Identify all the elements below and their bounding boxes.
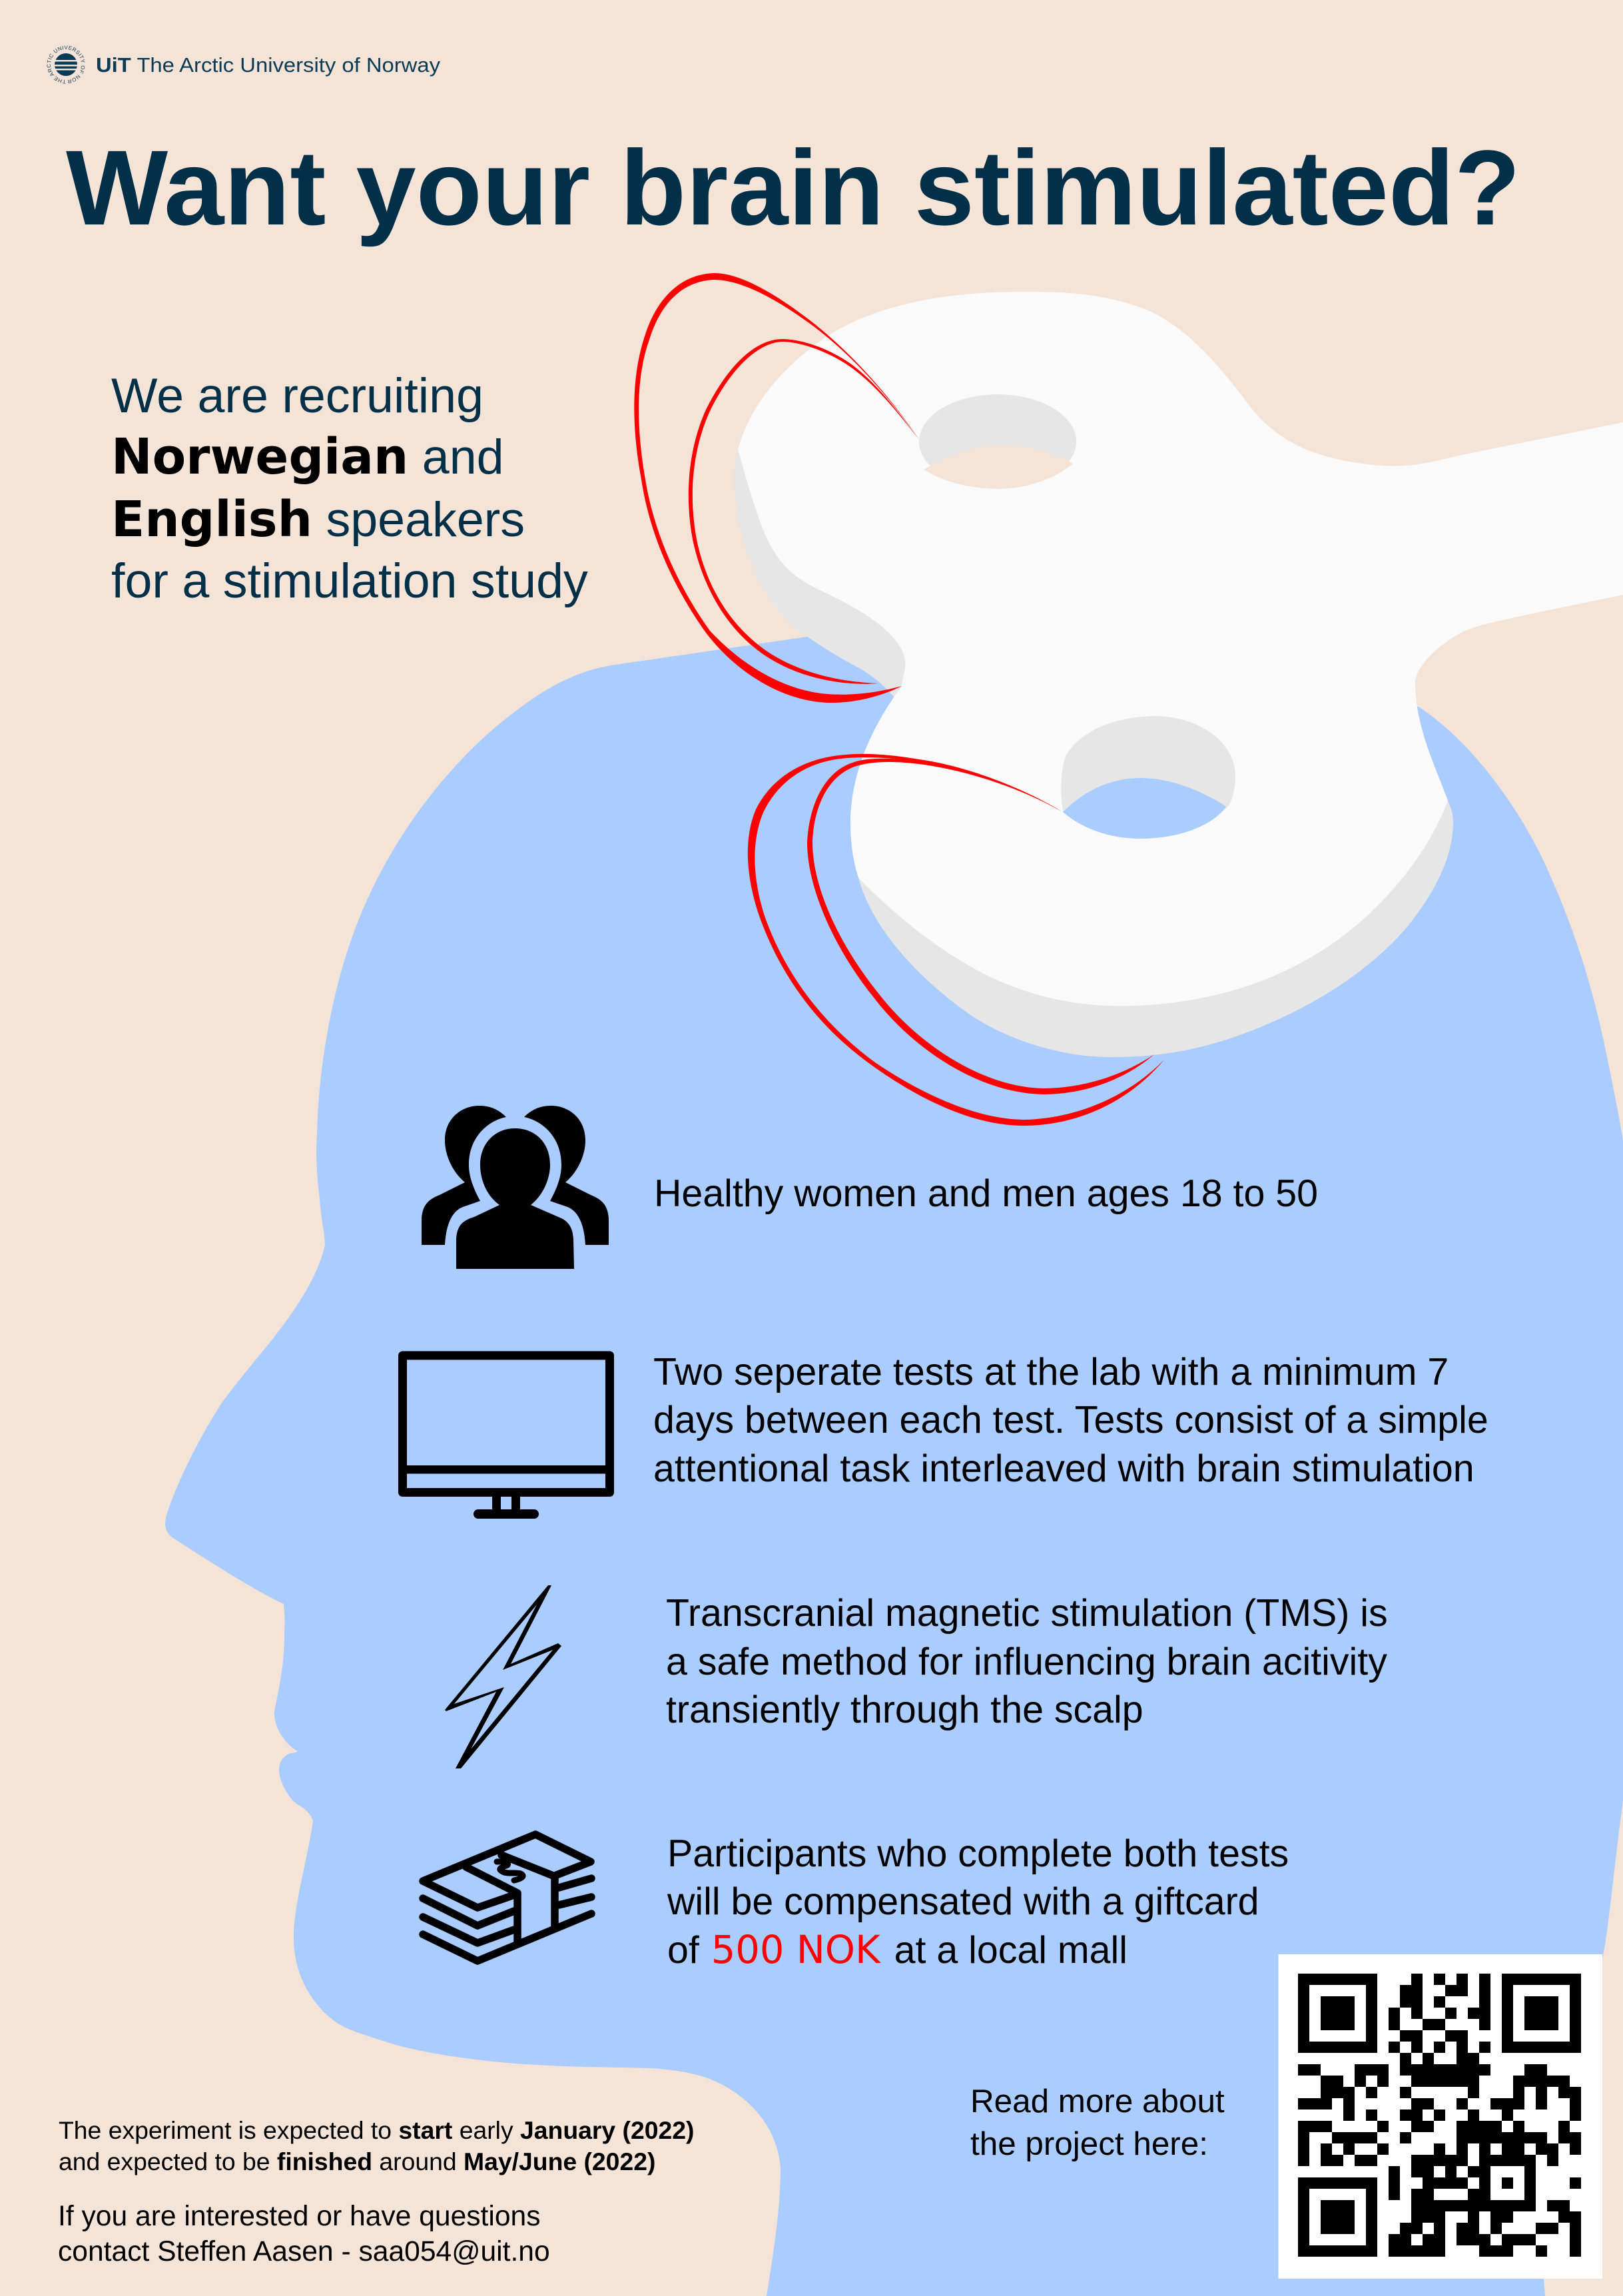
text: compensation (667, 1832, 1289, 1972)
text: read more: Read more about (970, 2083, 1225, 2119)
figure-8 TMS coil (734, 292, 1623, 1057)
recruiting intro text (111, 368, 588, 608)
text: compensation: of 500 NOK at a local mall (667, 1928, 1128, 1972)
text: contact (58, 2200, 550, 2267)
text: read more (970, 2083, 1225, 2162)
lower inner field line (807, 759, 1154, 1094)
lower outer field line (748, 754, 1164, 1126)
text: contact: If you are interested or have questions (58, 2200, 541, 2232)
text: tests: Two seperate tests at the lab with a minimum 7 (653, 1351, 1449, 1393)
text: schedule (59, 2116, 694, 2175)
text: contact: contact Steffen Aasen - saa054@uit.no (58, 2235, 550, 2267)
title: Want your brain stimulated? (66, 128, 1520, 247)
logo wordmark: UiT The Arctic University of Norway (96, 53, 441, 77)
text: compensation: Participants who complete both tests (667, 1832, 1289, 1875)
head silhouette (165, 637, 1623, 2296)
text: tests: attentional task interleaved with brain stimulation (653, 1447, 1474, 1490)
text: read more: the project here: (970, 2125, 1208, 2162)
coil top surface (738, 292, 1623, 1006)
red magnetic field lines (634, 273, 1164, 1126)
coil side bottom (858, 799, 1453, 1057)
icon: people (422, 1106, 609, 1269)
text: compensation: will be compensated with a giftcard (667, 1880, 1259, 1923)
text: tests (653, 1351, 1488, 1490)
text: TMS: Transcranial magnetic stimulation (TMS) is (666, 1592, 1388, 1635)
recruiting intro text: English speakers (111, 492, 525, 548)
upper inner field line (689, 339, 919, 684)
text: participants: Healthy women and men ages 18 to 50 (654, 1172, 1318, 1215)
icon: money stack (423, 1834, 591, 1961)
icon: lightning bolt (445, 1585, 561, 1768)
text: schedule: The experiment is expected to start early January (2022) (59, 2116, 694, 2144)
recruiting intro text: for a stimulation study (111, 553, 588, 608)
coil side left (734, 450, 932, 699)
text: schedule: and expected to be finished around May/June (2022) (59, 2147, 655, 2175)
logo seal (47, 45, 85, 84)
lower coil hole (1061, 716, 1235, 839)
text: TMS (666, 1592, 1388, 1731)
icon: monitor (398, 1355, 614, 1519)
text: tests: days between each test. Tests consist of a simple (653, 1399, 1488, 1441)
QR code (1279, 1954, 1602, 2279)
text: TMS: transiently through the scalp (666, 1689, 1143, 1731)
text: TMS: a safe method for influencing brain acitivity (666, 1641, 1387, 1683)
recruiting intro text: Norwegian and (111, 429, 504, 486)
logo: UiT The Arctic University of Norway (47, 45, 441, 84)
upper coil hole (919, 394, 1076, 489)
upper outer field line (634, 273, 919, 703)
recruiting intro text: We are recruiting (111, 368, 484, 423)
